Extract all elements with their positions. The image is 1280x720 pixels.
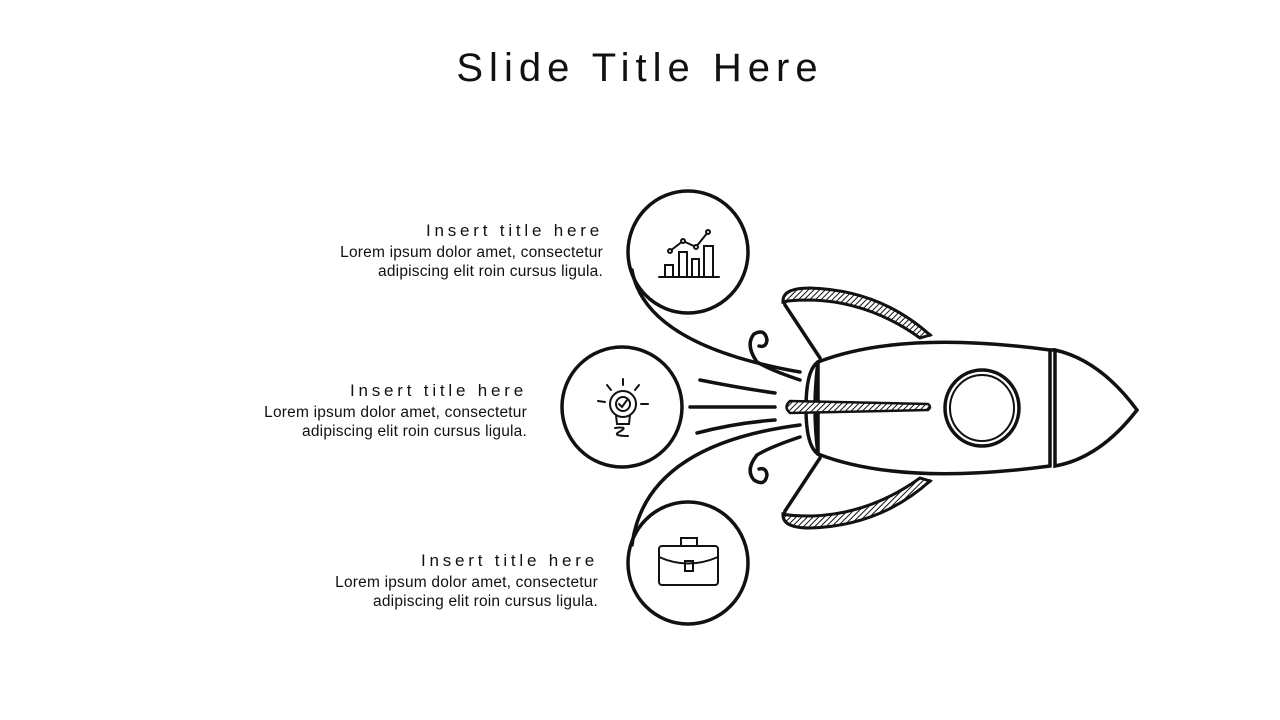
text block: item 2: Lorem ipsum dolor amet, consectetur [264, 404, 527, 421]
text block: item 1: Lorem ipsum dolor amet, consectetur [340, 244, 603, 261]
text block: item 2: adipiscing elit roin cursus ligula. [302, 423, 527, 440]
title: Slide Title Here [456, 46, 824, 90]
text block: item 3: Insert title here [421, 551, 598, 570]
exhaust trails [632, 270, 800, 545]
circle 2 [562, 347, 682, 467]
circle 1 [628, 191, 748, 313]
text block: item 3 [335, 551, 598, 610]
fins [783, 288, 930, 528]
text block: item 2 [264, 381, 527, 440]
rocket body [786, 342, 1137, 474]
icon: bar chart [659, 230, 719, 277]
icon: lightbulb [598, 379, 648, 436]
text block: item 1: adipiscing elit roin cursus ligula. [378, 263, 603, 280]
circle 3 [628, 502, 748, 624]
text block: item 1 [340, 221, 603, 280]
text block: item 1: Insert title here [426, 221, 603, 240]
text block: item 3: Lorem ipsum dolor amet, consectetur [335, 574, 598, 591]
text block: item 3: adipiscing elit roin cursus ligula. [373, 593, 598, 610]
text block: item 2: Insert title here [350, 381, 527, 400]
icon: briefcase [659, 538, 718, 585]
